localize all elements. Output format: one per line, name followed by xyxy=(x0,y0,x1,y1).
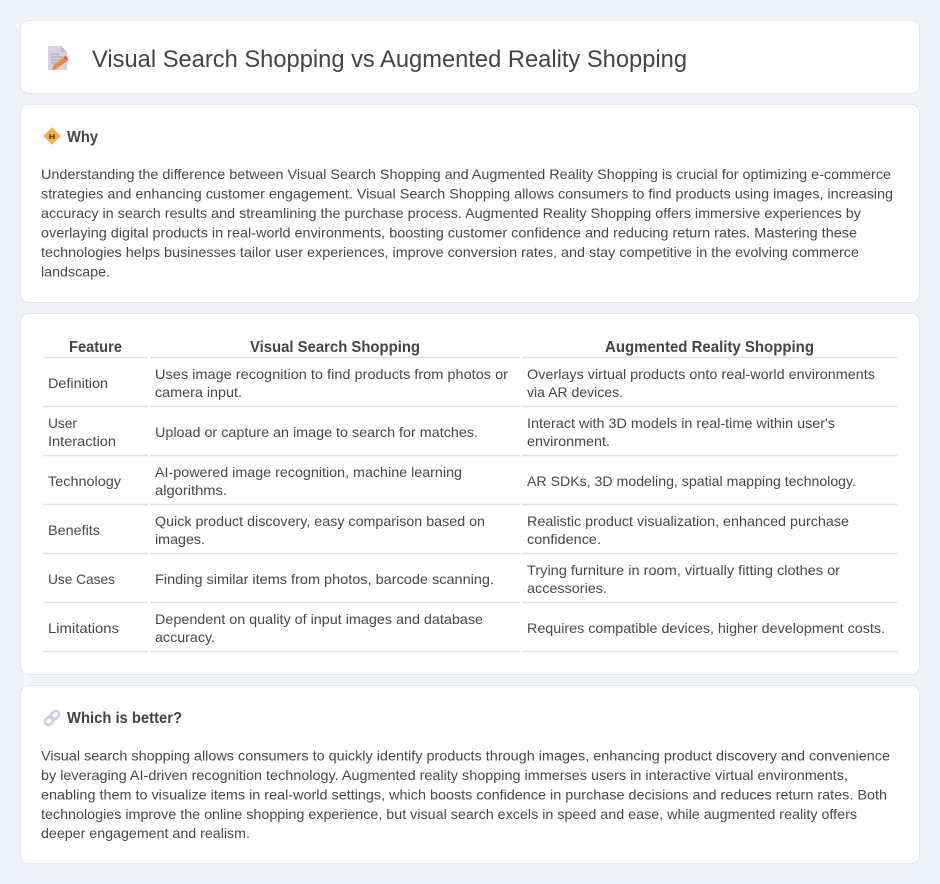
row: technology: algorithms. xyxy=(155,482,227,498)
row: user interaction: environment. xyxy=(527,433,610,449)
row: limitations: Requires compatible devices, higher development costs. xyxy=(527,620,885,636)
text block: which is better paragraph: Visual search shopping allows consumers to quickly identify products through images, enhancing product discovery and convenience xyxy=(41,748,890,764)
text block: why paragraph: Understanding the difference between Visual Search Shopping and Augmented Reality Shopping is crucial for optimizing e-commerce xyxy=(41,166,891,182)
row: benefits: confidence. xyxy=(527,531,601,547)
panel: which is better xyxy=(20,686,920,864)
row: user interaction: Upload or capture an image to search for matches. xyxy=(155,424,478,440)
row: limitations xyxy=(43,611,897,652)
row: limitations: Dependent on quality of input images and database xyxy=(155,611,483,627)
table header row: Visual Search Shopping xyxy=(250,339,420,356)
row: limitations: accuracy. xyxy=(155,629,215,645)
row: use cases: Finding similar items from photos, barcode scanning. xyxy=(155,571,494,587)
row: definition: Uses image recognition to find products from photos or xyxy=(155,366,508,382)
row: user interaction xyxy=(43,415,897,456)
panel: why xyxy=(20,104,920,302)
row: definition: camera input. xyxy=(155,384,242,400)
row: benefits: Benefits xyxy=(48,522,100,538)
text block: which is better paragraph: technologies improve the online shopping experience, but visual search excels in speed and ease, while augmented reality offers xyxy=(41,806,857,822)
row: use cases: Trying furniture in room, virtually fitting clothes or xyxy=(527,562,840,578)
table header row: Feature xyxy=(69,339,122,356)
row: user interaction: Interact with 3D models in real-time within user's xyxy=(527,415,835,431)
icon: document with pencil xyxy=(48,46,68,70)
row: benefits xyxy=(43,513,897,554)
row: technology xyxy=(43,464,897,504)
text block: why paragraph: strategies and enhancing customer engagement. Visual Search Shopping allows consumers to find products using images, increasing xyxy=(41,186,893,202)
text block: why paragraph: accuracy in search results and streamlining the purchase process. Augmented Reality Shopping offers immersive experiences by xyxy=(41,205,861,221)
row: definition: Overlays virtual products onto real-world environments xyxy=(527,366,875,382)
row: technology: AI-powered image recognition, machine learning xyxy=(155,464,462,480)
row: user interaction: Interaction xyxy=(48,433,116,449)
row: use cases: Use Cases xyxy=(48,571,115,587)
panel: comparison table xyxy=(20,314,920,674)
text block: which is better paragraph: enabling them to visualize items in real-world settings, which boosts confidence in purchase decisions and reduces return rates. Both xyxy=(41,786,887,802)
row: use cases xyxy=(43,562,897,602)
row: technology: Technology xyxy=(48,473,121,489)
text block: which is better paragraph xyxy=(41,748,890,841)
table header row xyxy=(43,339,897,358)
row: user interaction: User xyxy=(48,415,77,431)
text block: why paragraph xyxy=(41,166,893,280)
row: technology: AR SDKs, 3D modeling, spatial mapping technology. xyxy=(527,473,856,489)
text block: why paragraph: overlaying digital products in real-world environments, boosting customer confidence and reducing return rates. Mastering these xyxy=(41,224,857,240)
row: limitations: Limitations xyxy=(48,620,119,636)
row: benefits: Quick product discovery, easy comparison based on xyxy=(155,513,485,529)
title: Visual Search Shopping vs Augmented Reality Shopping xyxy=(92,46,687,73)
text block: which is better paragraph: by leveraging AI-driven recognition technology. Augmented reality shopping immerses users in interactive virtual environments, xyxy=(41,767,848,783)
table header row: Augmented Reality Shopping xyxy=(605,339,814,356)
panel: page header xyxy=(20,20,920,94)
text block: why paragraph: landscape. xyxy=(41,264,110,280)
heading: which is better: Which is better? xyxy=(67,710,182,727)
icon: link xyxy=(44,710,60,726)
row: use cases: accessories. xyxy=(527,580,607,596)
heading: why: Why xyxy=(67,129,98,146)
text block: why paragraph: technologies helps businesses tailor user experiences, improve conversion rates, and stay competitive in the evolving commerce xyxy=(41,244,859,260)
row: benefits: Realistic product visualization, enhanced purchase xyxy=(527,513,849,529)
row: benefits: images. xyxy=(155,531,205,547)
row: definition: via AR devices. xyxy=(527,384,623,400)
row: definition xyxy=(43,366,897,406)
text block: which is better paragraph: deeper engagement and realism. xyxy=(41,825,250,841)
row: definition: Definition xyxy=(48,375,108,391)
icon: warning diamond xyxy=(44,128,60,144)
